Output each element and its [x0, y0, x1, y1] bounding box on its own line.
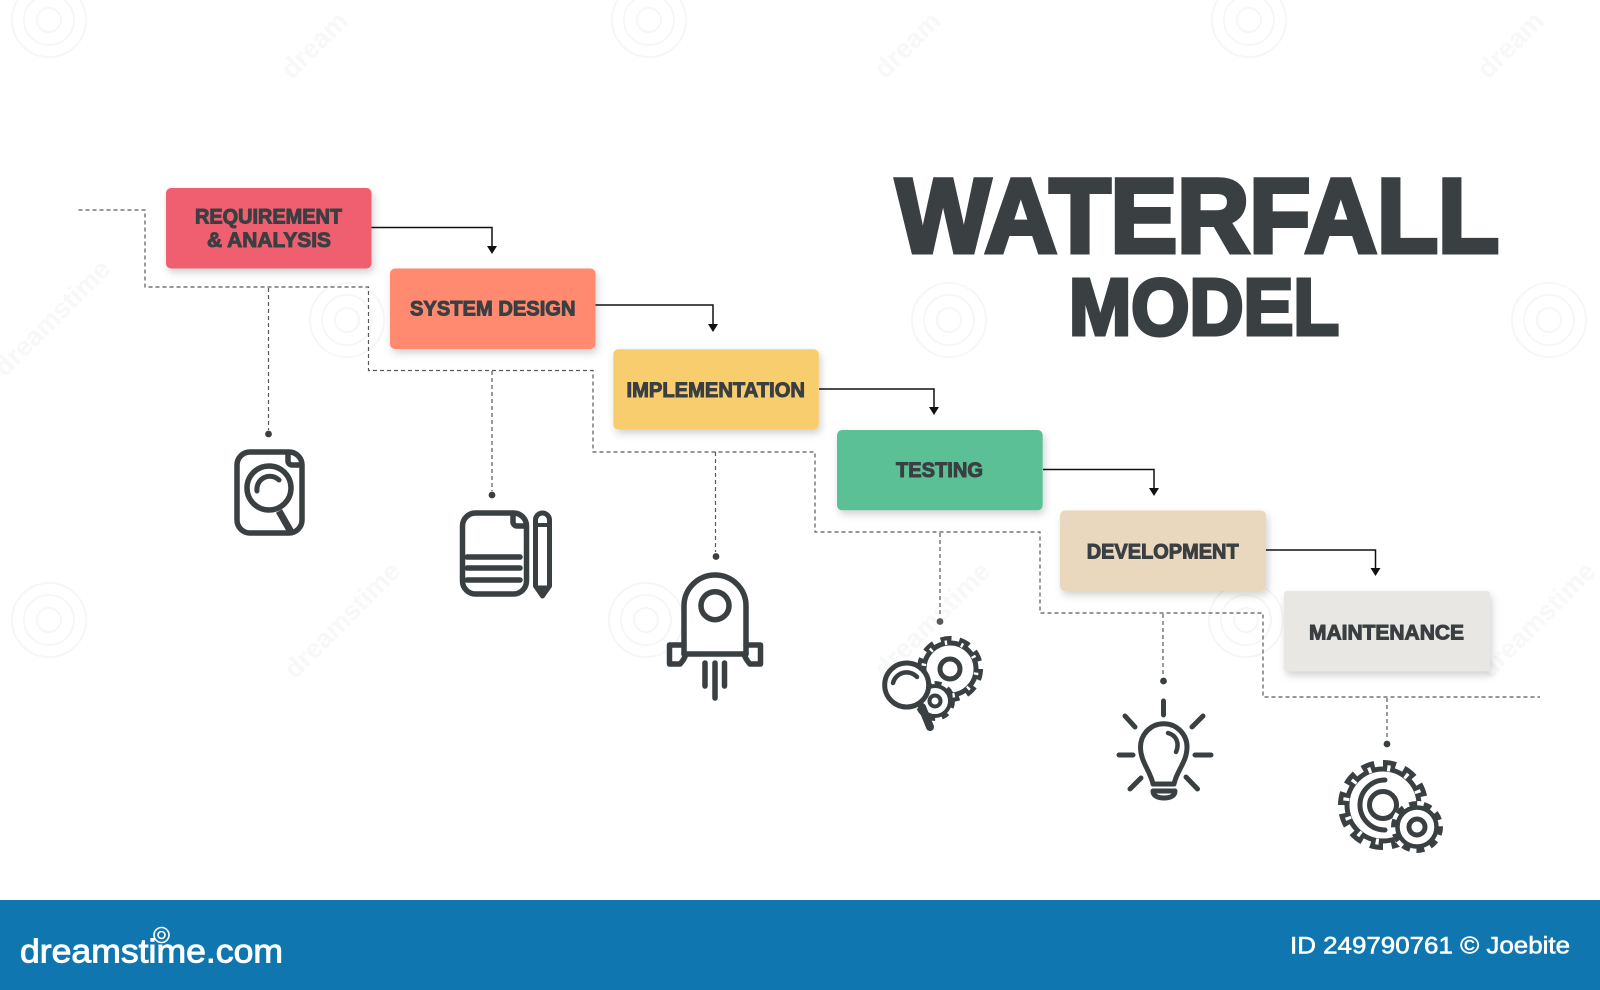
- leader 5 with dot: [1160, 614, 1167, 684]
- big gear: [1342, 764, 1424, 846]
- watermark pattern: dreamstime: [1473, 556, 1600, 684]
- step 2: system design: [390, 268, 596, 349]
- title line: MODEL: MODEL: [1069, 263, 1339, 352]
- box: [1284, 591, 1490, 672]
- arrow 2 to 3: [596, 305, 718, 332]
- box: [837, 430, 1043, 510]
- arrow 3 to 4: [819, 389, 939, 415]
- step 6: maintenance: [1284, 591, 1490, 672]
- label: IMPLEMENTATION: [626, 379, 805, 402]
- icon: document with magnifier: [237, 452, 302, 533]
- title: [896, 158, 1499, 352]
- leader 1 with dot: [265, 288, 272, 437]
- small gear: [1391, 801, 1443, 853]
- box: [166, 188, 372, 268]
- watermark pattern: dream: [868, 6, 947, 84]
- footer bar: [0, 900, 1600, 990]
- arrow 5 to 6: [1266, 550, 1380, 576]
- watermark pattern: dream: [275, 6, 354, 84]
- arrow 4 to 5: [1043, 470, 1159, 496]
- label: TESTING: [896, 459, 983, 482]
- dashed staircase line: [78, 210, 1540, 697]
- image id and author: ID 249790761 © Joebite: [1290, 932, 1570, 959]
- label: REQUIREMENT: [195, 206, 342, 228]
- watermark pattern: [0, 0, 1600, 684]
- logo spiral: [154, 928, 169, 942]
- leader 4 with dot: [937, 533, 943, 625]
- box: [390, 268, 596, 349]
- step 1: requirement and analysis: [166, 188, 372, 268]
- label: SYSTEM DESIGN: [410, 298, 576, 320]
- step 5: development: [1060, 510, 1266, 591]
- watermark pattern: dream: [1471, 6, 1550, 84]
- arrow 1 to 2: [372, 228, 497, 254]
- watermark pattern: dreamstime: [868, 556, 996, 684]
- label: & ANALYSIS: [207, 229, 331, 252]
- label: DEVELOPMENT: [1087, 540, 1239, 564]
- logo text: dreamstime.com: [20, 932, 283, 970]
- step 3: implementation: [613, 349, 819, 430]
- leader 3 with dot: [713, 452, 719, 560]
- icon: magnifier and gears: [885, 640, 980, 727]
- leader 2 with dot: [489, 371, 495, 498]
- box: [1060, 510, 1266, 591]
- icon: gears: [1342, 764, 1443, 853]
- icon: rocket: [670, 575, 760, 698]
- big gear: [920, 640, 980, 698]
- small gear: [918, 684, 952, 718]
- icon: notes and pencil: [462, 513, 550, 596]
- icon: light bulb: [1119, 701, 1211, 798]
- box: [613, 349, 819, 430]
- label: MAINTENANCE: [1309, 622, 1464, 644]
- watermark pattern: dreamstime: [278, 556, 406, 684]
- magnifier: [885, 663, 930, 727]
- step 4: testing: [837, 430, 1043, 510]
- title line: WATERFALL: WATERFALL: [896, 158, 1499, 275]
- leader 6 with dot: [1384, 698, 1390, 747]
